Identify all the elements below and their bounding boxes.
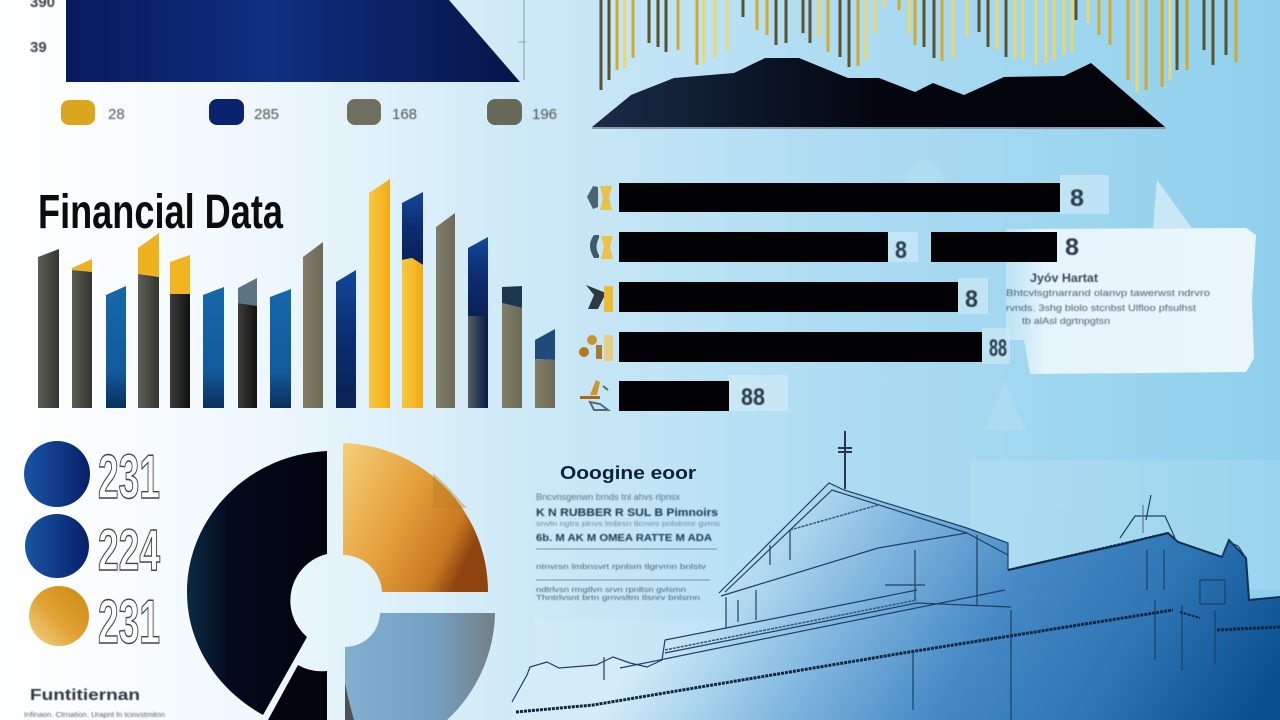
- icons beside the bars: [579, 186, 613, 410]
- building body: [512, 485, 1280, 720]
- hanging gold strips: [601, 0, 1236, 92]
- block heading: Ooogine eoor: [560, 463, 696, 483]
- block lines: ntnvrsn lmbnsvrt rpnlsm tlgrvmn bnlstv: [536, 564, 707, 571]
- bar chart: vertical bars: [38, 179, 555, 408]
- bar values: 8: [965, 286, 978, 313]
- slate segment: [345, 613, 495, 720]
- note body: rvnds. 3shg blolo stcnbst Ulfloo pfsulhst: [1006, 303, 1196, 314]
- stat: gold circle: [29, 586, 160, 657]
- stat: blue circle two: [25, 514, 160, 583]
- black segment: [187, 451, 327, 715]
- block lines: Thntrlvsnt brtn grnvsltm tlsnrv bnlsmn: [536, 595, 700, 602]
- icon 1: [587, 186, 612, 210]
- legend item: olive one: [347, 99, 417, 125]
- bar values: 88: [989, 335, 1007, 362]
- faint background shapes: [535, 160, 1280, 720]
- bar values: 88: [741, 384, 765, 411]
- legend item: olive two: [487, 99, 557, 125]
- icon 5: [580, 380, 608, 410]
- legend item: navy: [209, 99, 279, 125]
- block lines: 6b. M AK M OMEA RATTE M ADA: [536, 533, 712, 544]
- stat: blue circle one: 231: [98, 443, 160, 512]
- note body: [1006, 288, 1210, 327]
- gold segment: [343, 443, 488, 592]
- stat list: [24, 441, 160, 657]
- icon 3: [586, 285, 613, 312]
- legend item: gold: 28: [108, 106, 125, 123]
- horizontal bar chart: [619, 175, 1109, 411]
- small spire: [1142, 505, 1144, 533]
- legend item: olive two: 196: [532, 106, 557, 123]
- heading: Financial Data: Financial Data: [38, 186, 283, 239]
- bar values: [741, 185, 1084, 411]
- building outlines: [512, 483, 1280, 720]
- black bars: [619, 183, 1060, 212]
- legend item: navy: 285: [254, 106, 279, 123]
- axis label lower: 39: [30, 39, 47, 56]
- note body: tb alAsl dgrtnpgtsn: [1022, 316, 1110, 327]
- donut chart: [187, 443, 495, 720]
- icon 2: [590, 235, 613, 259]
- stat: blue circle two: 224: [98, 518, 160, 583]
- chart axis: [518, 0, 526, 80]
- mountain silhouette: [592, 58, 1166, 129]
- footnote left: Funtitiernan: [30, 687, 140, 704]
- block lines: Bncvnsgenwn brnds tnl ahvs rlpnsx: [536, 492, 681, 502]
- cross on roof: [838, 431, 852, 489]
- note title: Jyóv Hartat: [1030, 271, 1098, 285]
- footnote left: [24, 687, 165, 719]
- black lower segment: [268, 665, 327, 720]
- bar values: 8: [895, 237, 907, 264]
- block lines: snvtn ngtrs plnvs lmbrsn tlcnvrs pnlstnmr gvrns: [536, 521, 721, 528]
- value tag boxes: [728, 175, 1109, 411]
- block lines: [536, 492, 721, 602]
- legend item: gold: [61, 100, 125, 125]
- text block: middle: [536, 463, 721, 602]
- block lines: ndtrlvsn rmgtlvn srvn rpnltsn gvlsmn: [536, 587, 686, 594]
- building sketch: [512, 431, 1280, 720]
- baseline: [592, 127, 1166, 129]
- note body: Bhtcvlsgtnarrand olanvp tawerwst ndrvro: [1006, 288, 1210, 299]
- note panel: [1006, 228, 1256, 374]
- footnote left: Infinaon. Ctrnation. Urapnt ln tcinvstmitnn: [24, 712, 165, 719]
- block lines: K N RUBBER R SUL B Pimnoirs: [536, 507, 718, 519]
- bar values: 8: [1065, 234, 1079, 261]
- bar values: 8: [1070, 185, 1084, 212]
- legend item: olive one: 168: [392, 106, 417, 123]
- stat: gold circle: 231: [98, 588, 160, 657]
- dark cornice: [516, 505, 1280, 712]
- legend row: [61, 99, 557, 125]
- pale triangle above note: [1153, 180, 1192, 228]
- area chart: dark navy: [30, 0, 526, 82]
- stat: blue circle one: [24, 441, 160, 512]
- icon 4: [579, 335, 613, 361]
